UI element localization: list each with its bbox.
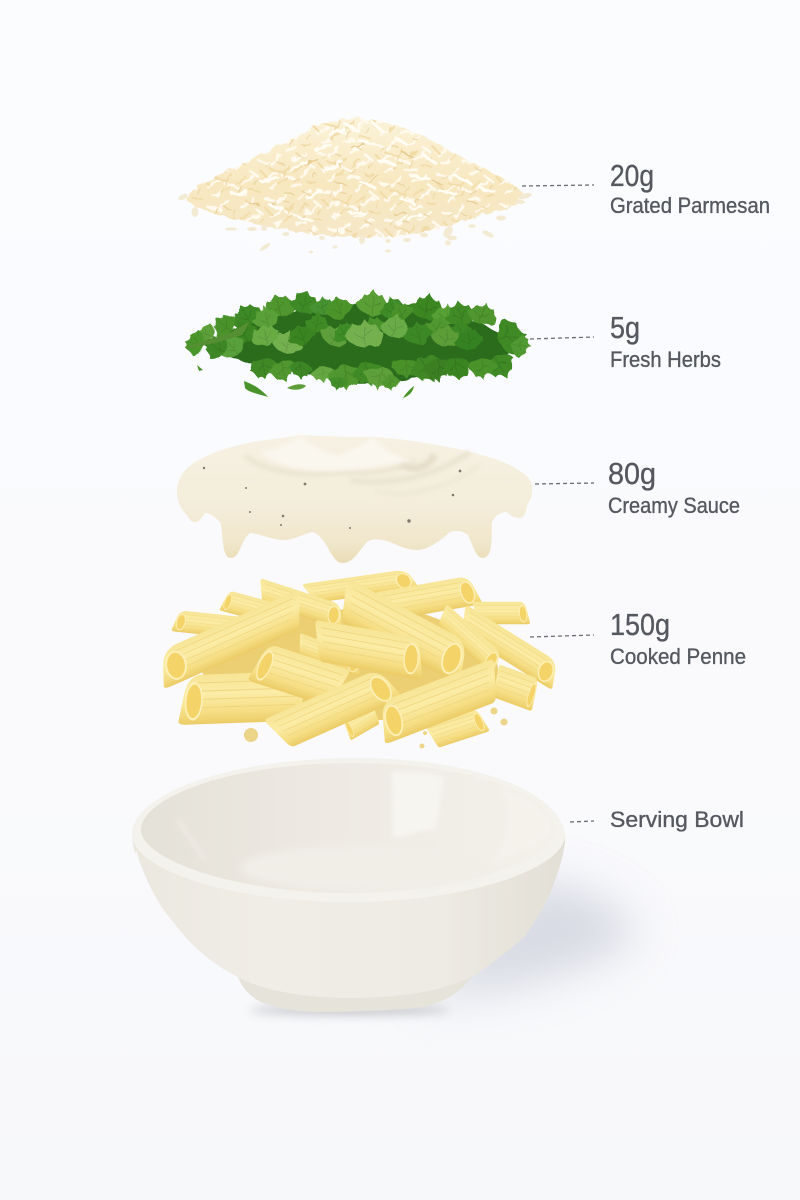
bowl rim <box>132 758 565 902</box>
herb leaves <box>182 288 533 393</box>
stray herb pieces <box>185 321 414 398</box>
leader lines <box>522 185 594 822</box>
label: cooked penne: Cooked Penne <box>610 644 746 669</box>
bowl interior <box>141 763 557 893</box>
pasta drips <box>244 708 508 748</box>
label: fresh herbs: 5g <box>610 310 640 345</box>
sauce swirl shading <box>245 435 480 494</box>
serving bowl <box>132 758 640 1015</box>
cooked penne stack <box>150 568 566 753</box>
label: fresh herbs <box>610 310 721 372</box>
label: serving bowl: Serving Bowl <box>610 807 744 832</box>
label: cooked penne: 150g <box>610 607 670 642</box>
label: fresh herbs: Fresh Herbs <box>610 347 721 372</box>
label: grated parmesan: Grated Parmesan <box>610 193 770 218</box>
label: creamy sauce <box>608 456 740 518</box>
scattered cheese crumbs <box>177 192 532 253</box>
label: grated parmesan: 20g <box>610 158 654 193</box>
label: grated parmesan <box>610 158 770 218</box>
grated parmesan pile <box>177 118 532 253</box>
label: creamy sauce: Creamy Sauce <box>608 493 740 518</box>
label: creamy sauce: 80g <box>608 456 656 491</box>
label: cooked penne <box>610 607 746 669</box>
creamy sauce <box>177 435 532 563</box>
fresh herbs pile <box>182 288 533 398</box>
pepper specks <box>203 467 461 529</box>
